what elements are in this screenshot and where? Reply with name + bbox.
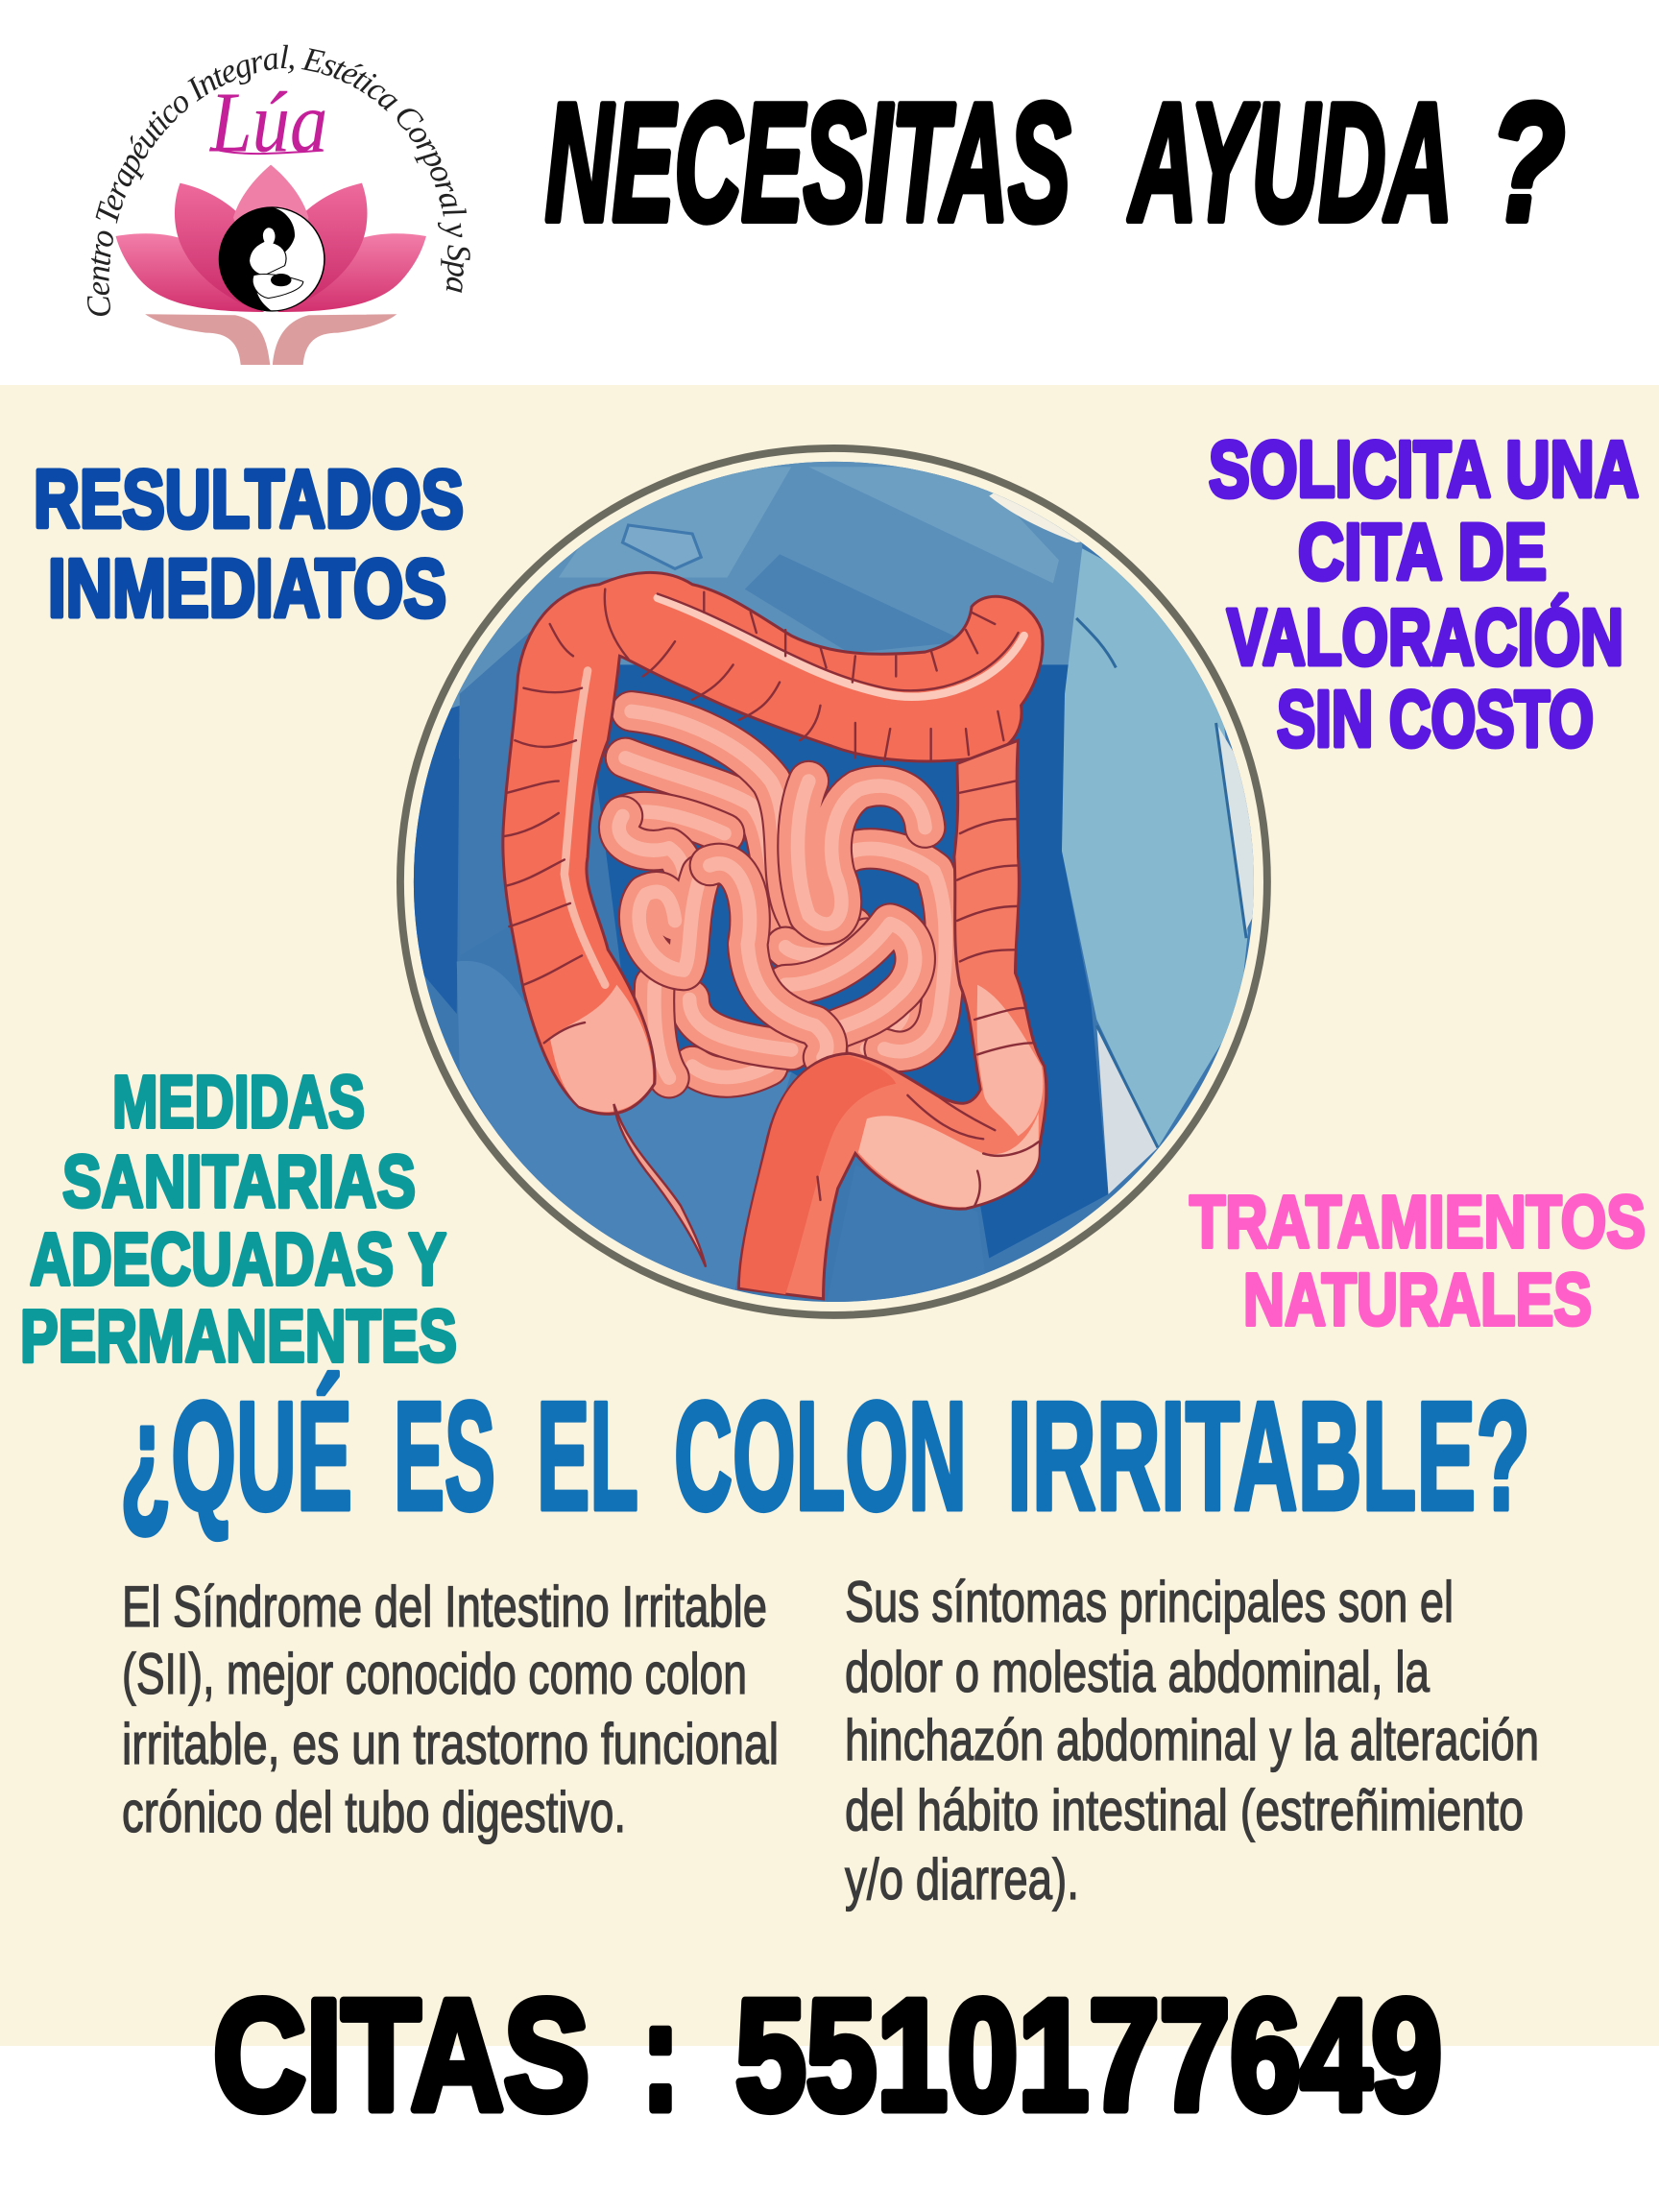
sigmoid highlight <box>858 1113 1039 1207</box>
callout: solicita una cita <box>1209 424 1639 763</box>
large intestine: descending colon and rectum <box>739 740 1046 1299</box>
logo name script: Lúa <box>208 74 327 170</box>
text block: symptoms <box>845 1570 1539 1911</box>
light blue right panel <box>1062 548 1248 1147</box>
contact: citas phone number <box>213 1967 1442 2143</box>
icon: lotus flower <box>116 165 426 312</box>
logo: Lúa wellness centre <box>86 44 470 365</box>
logo curved text: Centro Terapéutico Integral, Estética Corporal y Spa <box>86 44 470 316</box>
large intestine: ascending and transverse colon <box>503 572 1043 1114</box>
title: NECESITAS <box>545 68 1070 255</box>
circle frame <box>400 448 1267 1315</box>
text block: definition: (SII), mejor conocido como colon <box>122 1642 747 1706</box>
body background <box>407 455 1268 1316</box>
text block: definition: El Síndrome del Intestino Irritable <box>122 1575 767 1639</box>
callout: tratamientos naturales <box>1190 1181 1646 1341</box>
callout: resultados inmediatos: RESULTADOS <box>34 454 464 545</box>
caecum highlight <box>550 985 653 1112</box>
icon: yin yang with massage figures <box>219 207 325 311</box>
panel: cream background band <box>0 385 1659 2046</box>
small intestine <box>619 711 946 1078</box>
callout: resultados inmediatos: INMEDIATOS <box>48 543 446 635</box>
pale corners <box>1096 1025 1158 1194</box>
text block: definition: crónico del tubo digestivo. <box>122 1780 626 1844</box>
callout: resultados inmediatos <box>34 454 464 635</box>
contact: citas phone number: 5510177649 <box>735 1967 1442 2143</box>
appendix <box>613 1104 706 1267</box>
callout: solicita una cita: CITA DE <box>1298 507 1547 596</box>
text block: symptoms: dolor o molestia abdominal, la <box>845 1640 1430 1704</box>
heading: que es el colon irritable: ¿QUÉ <box>120 1370 352 1543</box>
taenia bands and haustra <box>503 589 1024 1043</box>
heading: que es el colon irritable: ES <box>394 1370 495 1543</box>
descending colon haustra <box>817 781 1039 1206</box>
callout: medidas sanitarias: SANITARIAS <box>62 1141 416 1223</box>
callout: medidas sanitarias: MEDIDAS <box>112 1061 365 1143</box>
contact: citas phone number: CITAS <box>213 1967 589 2143</box>
dark cavity behind bowel <box>582 664 1108 1259</box>
heading: que es el colon irritable <box>120 1370 1530 1543</box>
text block: symptoms: y/o diarrea). <box>845 1847 1079 1911</box>
contact: citas phone number: : <box>641 1967 680 2143</box>
callout: medidas sanitarias: PERMANENTES <box>20 1295 457 1378</box>
heading: que es el colon irritable: EL <box>537 1370 638 1543</box>
title: ? <box>1490 68 1565 255</box>
callout: medidas sanitarias <box>20 1061 457 1378</box>
illustration: intestines in circle <box>400 448 1268 1316</box>
text block: symptoms: Sus síntomas principales son el <box>845 1570 1454 1634</box>
text block: definition <box>122 1575 779 1844</box>
callout: medidas sanitarias: ADECUADAS Y <box>30 1218 446 1301</box>
heading: que es el colon irritable: COLON <box>674 1370 967 1543</box>
icon: open hands <box>145 314 397 365</box>
text block: definition: irritable, es un trastorno funcional <box>122 1712 779 1776</box>
rectum bright tube <box>740 1056 896 1294</box>
